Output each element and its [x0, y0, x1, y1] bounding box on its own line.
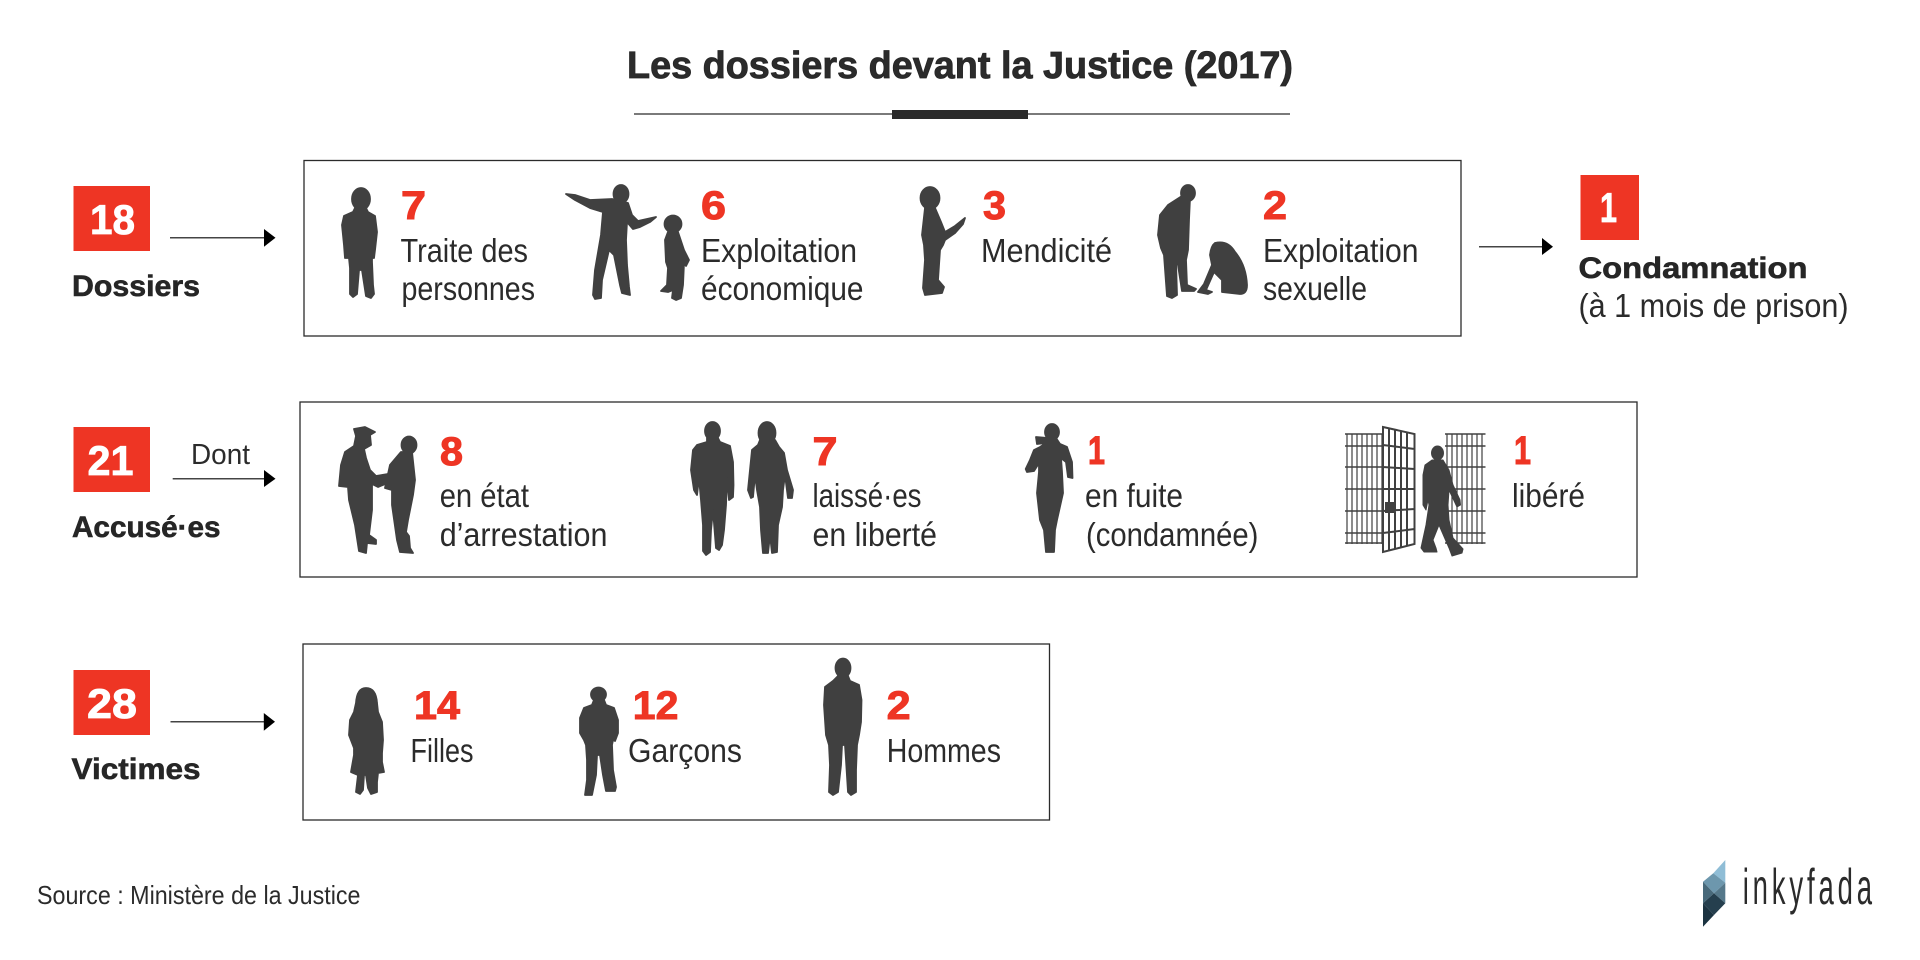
text: en état d'arrestation: en état: [440, 477, 529, 514]
panel: dossiers: [304, 160, 1461, 336]
number 6: 6: [701, 184, 726, 228]
source: Source : Ministère de la Justice: [37, 880, 360, 910]
logo: inkyfada: [1703, 858, 1876, 927]
icon: girl: [349, 688, 384, 794]
number 14: 14: [414, 684, 461, 728]
counter: 18 dossiers: 18: [90, 196, 135, 243]
item: filles: [349, 684, 474, 794]
arrow: dossiers to panel: [170, 229, 276, 247]
label: Dont: Dont: [191, 439, 250, 471]
counter: 28 victimes: 28: [87, 680, 137, 727]
text: Garçons: Garçons: [628, 732, 742, 769]
counter: 21 accusé·es: 21: [88, 437, 134, 484]
icon: man and sitting girl: [1158, 185, 1247, 298]
item: garçons: [580, 684, 742, 795]
text: laissé·es en liberté: en liberté: [812, 516, 937, 553]
text: laissé·es en liberté: laissé·es: [812, 477, 922, 514]
icon: child: [342, 188, 377, 298]
text: Exploitation sexuelle: Exploitation: [1263, 232, 1418, 269]
item: en fuite: [1026, 424, 1258, 553]
text: Exploitation sexuelle: [1263, 232, 1418, 307]
text: Exploitation économique: Exploitation: [701, 232, 857, 269]
text: en état d'arrestation: d’arrestation: [440, 516, 608, 553]
icon: man: [824, 658, 862, 795]
number 7: 7: [401, 184, 426, 228]
counter: 28 victimes: [74, 670, 150, 735]
label: Victimes: Victimes: [72, 753, 200, 786]
counter: 1 condamnation: 1: [1600, 184, 1617, 231]
text: libéré: libéré: [1512, 477, 1585, 514]
text: en état d'arrestation: [440, 477, 608, 553]
logo mark: [1703, 860, 1725, 927]
panel: accusé·es: [300, 402, 1637, 577]
text: Condamnation: Condamnation: [1578, 252, 1808, 285]
number 1: 1: [1088, 429, 1105, 473]
item: exploitation sexuelle: [1158, 184, 1418, 307]
item: hommes: [824, 658, 1001, 795]
text: Mendicité: Mendicité: [981, 232, 1112, 269]
icon: begging child: [920, 187, 965, 295]
title rule: [634, 110, 1290, 119]
icon: man walking out of a prison gate: [1345, 427, 1486, 556]
icon: boy: [580, 688, 618, 795]
icon: running woman: [1026, 424, 1072, 552]
number 12: 12: [633, 684, 678, 728]
item: en état d'arrestation: [339, 427, 608, 553]
number 3: 3: [983, 184, 1006, 228]
text: Condamnation: (à 1 mois de prison): [1578, 287, 1848, 324]
arrow: accusé·es to panel: [173, 470, 276, 487]
text: Traite des personnes: [400, 232, 535, 307]
icon: officer arresting a man: [339, 427, 416, 553]
text: Filles: Filles: [410, 732, 474, 769]
item: mendicité: [920, 184, 1112, 295]
number 2: 2: [887, 684, 911, 728]
label: Dossiers: Dossiers: [72, 270, 200, 303]
item: traite des personnes: [342, 184, 535, 307]
text: Exploitation économique: économique: [701, 270, 864, 307]
counter: 1 condamnation: [1580, 175, 1639, 240]
icon: man and woman: [691, 422, 793, 555]
text: en fuite (condamnée): (condamnée): [1086, 516, 1258, 553]
title: Les dossiers devant la Justice (2017): [627, 45, 1293, 87]
text: Traite des personnes: Traite des: [400, 232, 528, 269]
number 1: 1: [1514, 429, 1531, 473]
text: Exploitation économique: [701, 232, 864, 307]
item: libéré: [1345, 427, 1585, 556]
label: Accusé·es: Accusé·es: [72, 511, 220, 544]
item: laissé·es en liberté: [691, 422, 937, 555]
text: laissé·es en liberté: [812, 477, 937, 553]
number 2: 2: [1263, 184, 1287, 228]
arrow: victimes to panel: [170, 713, 275, 731]
logo wordmark: inkyfada: [1743, 858, 1876, 915]
text: Condamnation: [1578, 252, 1848, 324]
panel: victimes: [303, 644, 1050, 820]
text: Traite des personnes: personnes: [402, 270, 535, 307]
text: en fuite (condamnée): en fuite: [1085, 477, 1183, 514]
number 7: 7: [812, 430, 838, 474]
item: exploitation économique: [566, 184, 864, 307]
counter: 21 accusé·es: [74, 427, 150, 492]
arrow: panel to condamnation: [1479, 238, 1553, 255]
counter: 18 dossiers: [74, 186, 150, 251]
text: Exploitation sexuelle: sexuelle: [1263, 270, 1367, 307]
number 8: 8: [440, 430, 463, 474]
text: en fuite (condamnée): [1085, 477, 1258, 553]
text: Hommes: Hommes: [887, 732, 1001, 769]
icon: man pointing at child: [566, 185, 689, 300]
